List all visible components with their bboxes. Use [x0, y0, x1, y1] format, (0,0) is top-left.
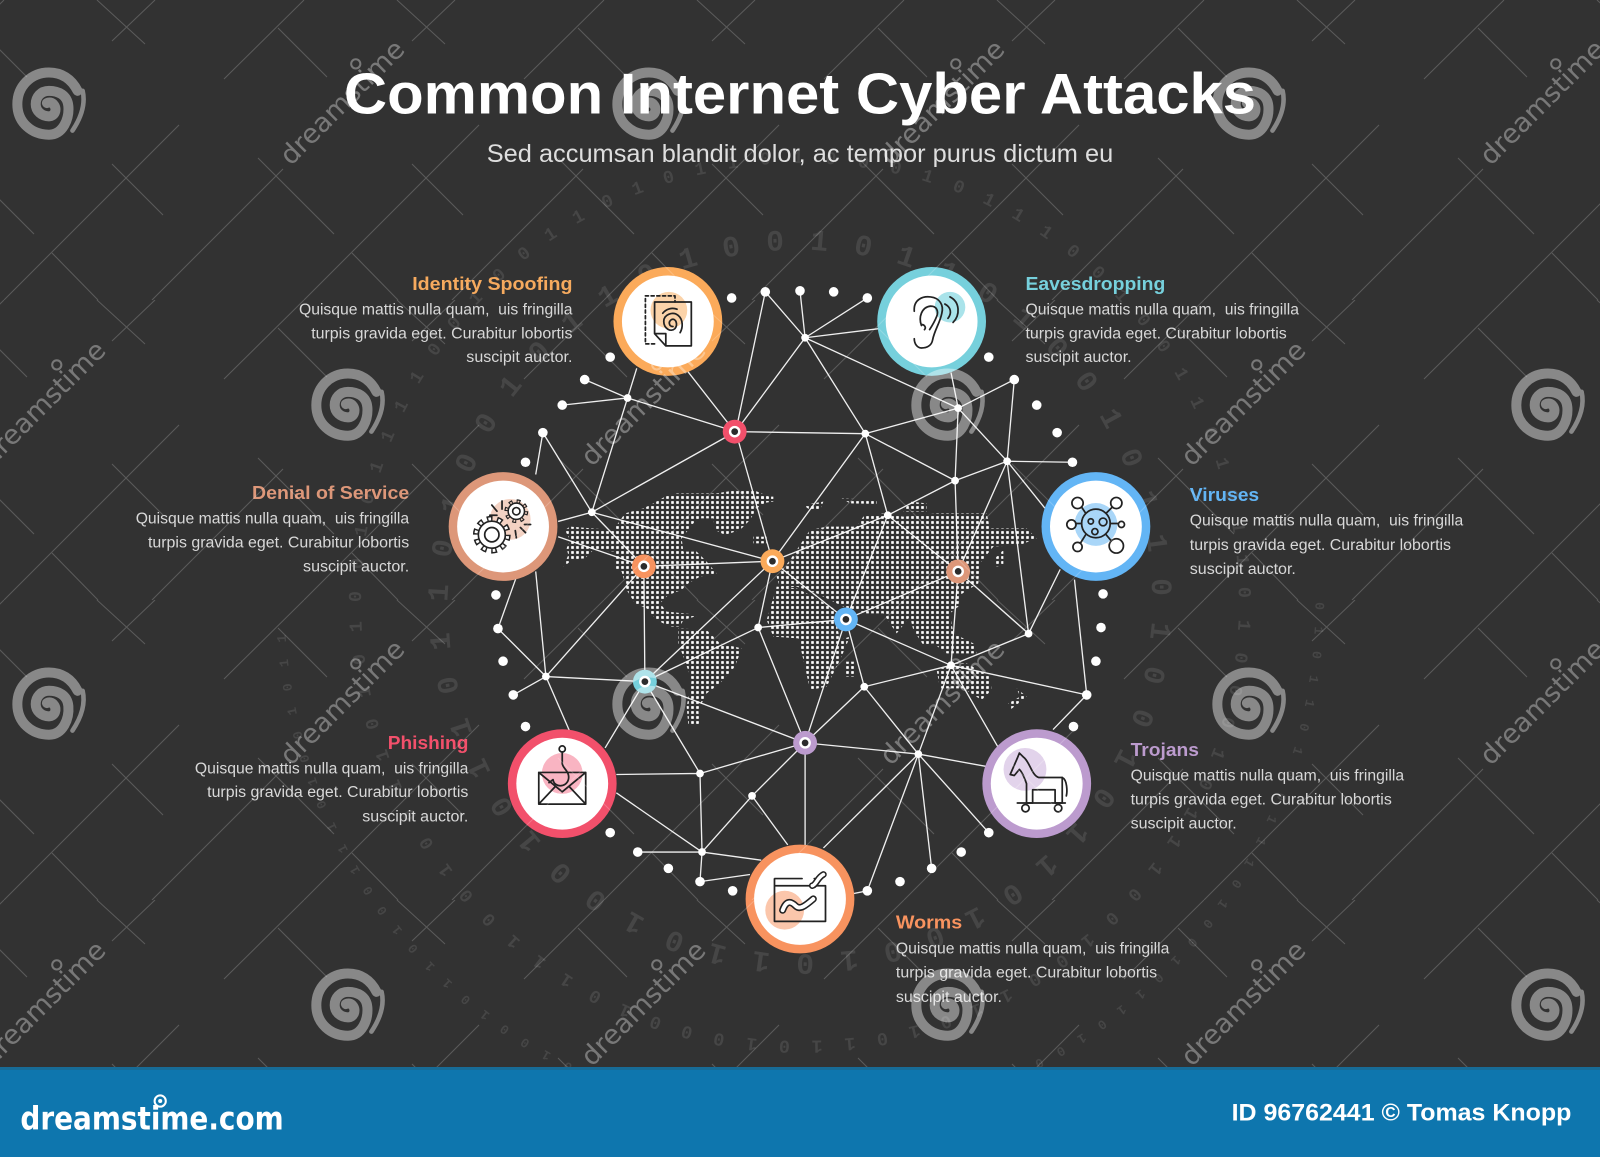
subtitle: Sed accumsan blandit dolor, ac tempor purus dictum eu: [487, 140, 1113, 168]
text block: denial of service: [136, 482, 409, 575]
text block: phishing: turpis gravida eget. Curabitur lobortis: [207, 784, 469, 801]
icon: eavesdropping: [877, 267, 986, 376]
hub node: terracotta: [946, 559, 970, 583]
text block: eavesdropping: suscipit auctor.: [1026, 349, 1132, 366]
text block: denial of service: Denial of Service: [252, 482, 409, 503]
watermark text: dreamstime: [575, 935, 712, 1072]
hub node: purple: [793, 731, 817, 755]
text block: phishing: suscipit auctor.: [362, 808, 468, 825]
watermark text: dreamstime: [1175, 935, 1312, 1072]
text block: denial of service: turpis gravida eget. Curabitur lobortis: [148, 534, 409, 551]
watermark text: dreamstime: [274, 34, 411, 171]
binary digit rings: 010110100111010010110100101101001110100101101001011010011101001011: [277, 603, 1324, 1067]
text block: worms: suscipit auctor.: [896, 989, 1002, 1006]
junction nodes: [542, 334, 1032, 856]
footer banner: [0, 1067, 1600, 1157]
watermark text: dreamstime: [874, 34, 1011, 171]
text block: trojans: Trojans: [1131, 739, 1199, 760]
text block: worms: Worms: [896, 912, 962, 933]
text block: phishing: Phishing: [388, 732, 468, 753]
hub node: amber: [761, 549, 784, 573]
text block: trojans: Quisque mattis nulla quam, uis fringilla: [1131, 768, 1404, 785]
icon: trojans: [982, 729, 1091, 838]
text block: identity spoofing: Identity Spoofing: [412, 273, 572, 294]
watermark text: dreamstime: [1175, 335, 1312, 472]
outer ring dots: [491, 286, 1108, 896]
text block: worms: turpis gravida eget. Curabitur lobortis: [896, 965, 1157, 982]
hub node: orange: [632, 554, 656, 578]
text block: denial of service: Quisque mattis nulla quam, uis fringilla: [136, 510, 409, 527]
text block: trojans: suscipit auctor.: [1131, 816, 1237, 833]
watermark text: dreamstime: [274, 634, 411, 771]
watermark text: dreamstime: [575, 335, 712, 472]
network lines: [498, 291, 1087, 895]
text block: denial of service: suscipit auctor.: [303, 558, 409, 575]
icon: viruses: [1042, 472, 1150, 581]
text block: worms: [896, 912, 1170, 1006]
text block: trojans: [1131, 739, 1404, 833]
text block: viruses: Quisque mattis nulla quam, uis fringilla: [1190, 513, 1464, 530]
text block: worms: Quisque mattis nulla quam, uis fringilla: [896, 941, 1170, 958]
dotted world map: [563, 490, 1037, 725]
text block: eavesdropping: Eavesdropping: [1026, 273, 1165, 294]
text block: viruses: turpis gravida eget. Curabitur lobortis: [1190, 537, 1451, 554]
text block: identity spoofing: Quisque mattis nulla quam, uis fringilla: [299, 301, 573, 318]
icon: denial of service: [449, 472, 557, 581]
icon: phishing: [508, 729, 617, 838]
text block: identity spoofing: [299, 273, 573, 366]
footer credit: ID 96762441 © Tomas Knopp: [1232, 1099, 1571, 1126]
icon: worms: [746, 845, 854, 953]
hub node: blue: [834, 607, 858, 631]
hub node: cyan: [633, 670, 657, 694]
text block: viruses: Viruses: [1190, 484, 1259, 505]
title: Common Internet Cyber Attacks: [344, 62, 1256, 126]
text block: eavesdropping: turpis gravida eget. Curabitur lobortis: [1026, 325, 1287, 342]
hub node: red: [723, 420, 747, 444]
text block: trojans: turpis gravida eget. Curabitur lobortis: [1131, 792, 1392, 809]
watermark text: dreamstime: [874, 634, 1011, 771]
text block: viruses: [1190, 484, 1464, 578]
footer logo: dreamstime.com: [20, 1102, 284, 1138]
text block: phishing: Quisque mattis nulla quam, uis fringilla: [195, 760, 469, 777]
text block: identity spoofing: suscipit auctor.: [466, 349, 572, 366]
icon: identity spoofing: [613, 267, 722, 376]
text block: eavesdropping: Quisque mattis nulla quam, uis fringilla: [1026, 301, 1299, 318]
text block: viruses: suscipit auctor.: [1190, 561, 1296, 578]
binary digit rings: 001011110010011010110100010111001001101011010001011100100110101101000101110010011010110100: [349, 151, 1251, 1053]
text block: identity spoofing: turpis gravida eget. Curabitur lobortis: [311, 325, 573, 342]
text block: eavesdropping: [1026, 273, 1299, 366]
text block: phishing: [195, 732, 469, 825]
